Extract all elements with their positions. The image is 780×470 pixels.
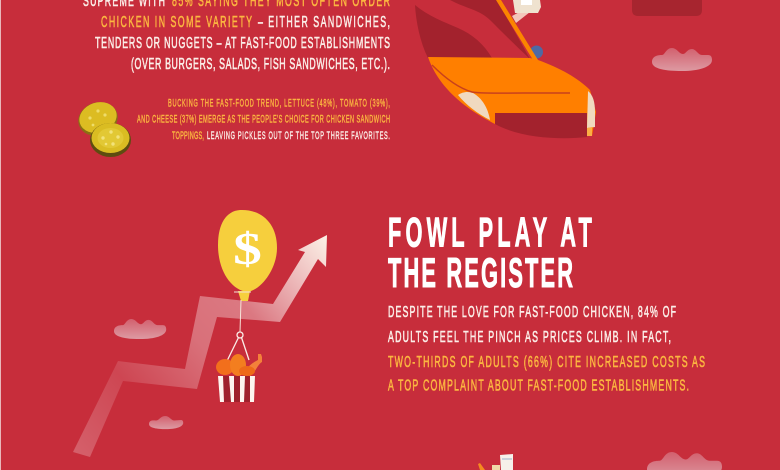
intro text block bbox=[83, 0, 390, 73]
icon: dollar balloon with chicken bucket bbox=[216, 210, 277, 402]
toppings note: LEAVING PICKLES OUT OF THE TOP THREE FAVORITES. bbox=[207, 129, 390, 142]
cloud: bottom right bbox=[647, 452, 722, 470]
bucket bbox=[218, 376, 255, 402]
body text: DESPITE THE LOVE FOR FAST-FOOD CHICKEN, 84% OF bbox=[388, 302, 676, 321]
heading bbox=[388, 210, 592, 297]
toppings note: AND CHEESE (37%) EMERGE AS THE PEOPLE'S CHOICE FOR CHICKEN SANDWICH bbox=[137, 112, 390, 125]
body text: ADULTS FEEL THE PINCH AS PRICES CLIMB. IN FACT, bbox=[388, 327, 671, 346]
toppings note: BUCKING THE FAST-FOOD TREND, LETTUCE (48%), TOMATO (39%), bbox=[168, 96, 390, 109]
icon: meal with drink cup bbox=[478, 454, 513, 470]
illustration: orange car bbox=[415, 0, 596, 138]
intro text block: CHICKEN IN SOME VARIETY bbox=[101, 12, 252, 31]
body text: TWO-THIRDS OF ADULTS (66%) CITE INCREASED COSTS AS bbox=[388, 352, 705, 371]
cloud: left middle bbox=[114, 319, 166, 339]
intro text block: – EITHER SANDWICHES, bbox=[258, 12, 390, 31]
dark rounded panel bbox=[632, 0, 702, 16]
cloud: lower left bbox=[149, 416, 183, 429]
chicken bbox=[247, 354, 262, 376]
toppings note: TOPPINGS, bbox=[172, 129, 204, 142]
body text bbox=[388, 302, 705, 394]
toppings note bbox=[137, 96, 390, 142]
icon: dollar balloon with chicken bucket: $ bbox=[233, 224, 262, 275]
intro text block: (OVER BURGERS, SALADS, FISH SANDWICHES, ETC.). bbox=[131, 54, 390, 73]
cloud: top right bbox=[652, 48, 712, 71]
chart: rising price arrow bbox=[73, 235, 327, 457]
body text: A TOP COMPLAINT ABOUT FAST-FOOD ESTABLISHMENTS. bbox=[388, 376, 689, 394]
icon: pickles bbox=[74, 97, 131, 157]
intro text block: TENDERS OR NUGGETS – AT FAST-FOOD ESTABLISHMENTS bbox=[95, 33, 390, 52]
heading: THE REGISTER bbox=[388, 251, 573, 297]
blue sleeve bbox=[530, 46, 543, 58]
heading: FOWL PLAY AT bbox=[388, 210, 592, 257]
